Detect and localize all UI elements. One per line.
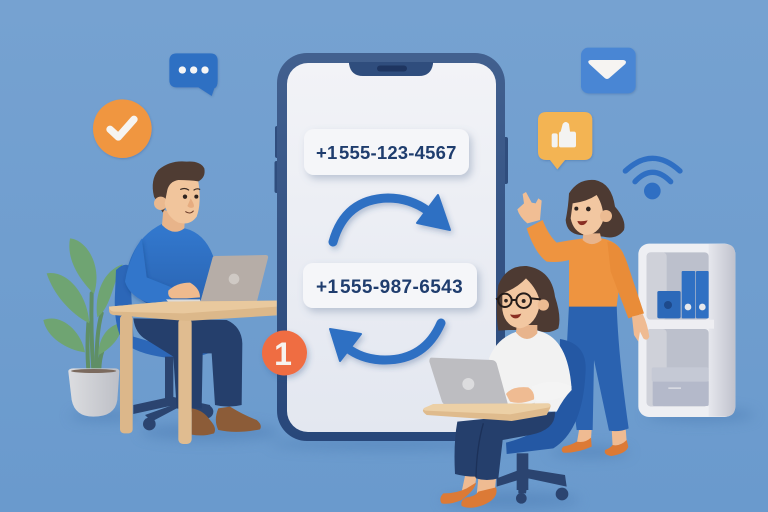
shelf board <box>647 320 714 329</box>
man chair <box>115 265 213 430</box>
seated woman torso <box>489 331 572 412</box>
plant leaves <box>43 238 123 355</box>
seated woman laptop <box>429 358 535 411</box>
seated woman feet <box>462 476 496 495</box>
binders <box>682 271 709 318</box>
standing woman head <box>566 180 624 244</box>
seated woman <box>423 266 586 508</box>
phone notch <box>349 62 433 76</box>
desk <box>109 301 277 444</box>
floor shadows <box>70 408 755 508</box>
icon: thumbs up <box>538 112 592 169</box>
man hand <box>168 283 200 298</box>
number pill: new number: +1555-987-6543 <box>316 277 463 298</box>
standing woman arm <box>607 242 644 318</box>
number pill: old number: +1555-123-4567 <box>316 142 457 163</box>
man shoes <box>192 407 261 435</box>
man legs <box>133 318 242 408</box>
phone speaker <box>377 66 407 72</box>
standing woman shoes <box>562 438 628 456</box>
group: top right icons <box>538 48 680 199</box>
phone body <box>277 53 505 441</box>
office chair <box>497 339 586 504</box>
storage box <box>652 367 709 406</box>
number pill: old number <box>304 129 469 175</box>
blue box file <box>657 291 681 318</box>
group: right scene <box>423 180 735 508</box>
shelf compartment lower <box>647 329 709 406</box>
man torso <box>125 224 213 305</box>
notification badge <box>262 330 307 376</box>
icon: chat bubble <box>169 53 218 96</box>
seated woman shoes <box>440 483 497 508</box>
phone screen <box>287 63 496 432</box>
seated woman tray <box>423 403 551 421</box>
icon: wifi <box>625 158 680 199</box>
standing woman <box>517 180 649 456</box>
man laptop <box>166 255 268 305</box>
man neck <box>162 210 185 232</box>
seated woman leg crease <box>476 423 483 477</box>
plant pot <box>68 368 119 417</box>
group: left scene <box>43 53 277 444</box>
arrow: clockwise bottom <box>330 323 441 361</box>
plant <box>43 238 123 417</box>
man head <box>153 161 205 224</box>
plant soil <box>71 369 116 373</box>
plant stems <box>87 293 103 370</box>
phone <box>274 53 508 441</box>
arrow: clockwise top <box>333 195 450 242</box>
standing woman torso <box>527 220 623 307</box>
bookshelf <box>638 244 735 417</box>
shelf compartment upper <box>647 252 709 320</box>
standing woman ankles <box>577 428 627 447</box>
seated woman legs <box>455 412 555 480</box>
standing woman legs <box>567 305 629 431</box>
notification badge: 1 <box>274 336 292 372</box>
seated woman head <box>496 266 559 339</box>
seated woman sleeve <box>532 382 572 402</box>
standing woman hand <box>632 314 649 342</box>
number pill: new number <box>303 263 477 308</box>
phone side buttons <box>274 126 508 193</box>
icon: envelope <box>581 48 636 93</box>
icon: check badge <box>93 99 152 158</box>
man sleeve <box>125 238 172 303</box>
standing woman raised hand <box>517 192 542 223</box>
shelf frame <box>638 244 735 417</box>
seated woman hand <box>506 387 534 403</box>
